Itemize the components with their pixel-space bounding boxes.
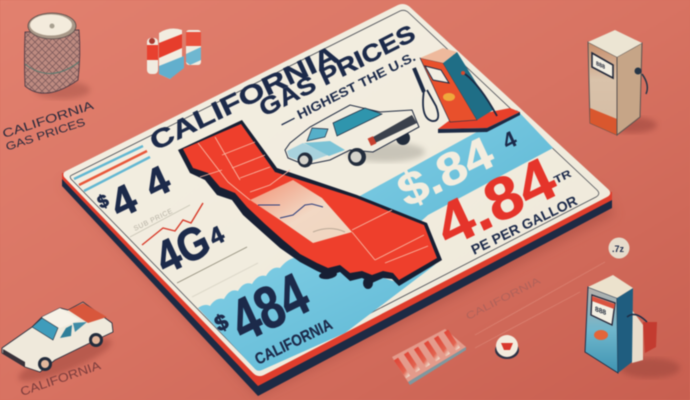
label: California Gas Prices: [0, 98, 99, 154]
title: California Gas Prices: GAS PRICES: [255, 20, 420, 122]
icon: standalone fuel pump top right: [588, 30, 657, 135]
price: $4 4: 4: [138, 158, 177, 207]
island: south: [363, 277, 373, 289]
label: California under truck: CALIFORNIA: [18, 358, 102, 399]
faint caption: SUB PRICE: [133, 208, 174, 233]
price: 4.84 per gallon: 4.84: [425, 144, 566, 260]
inner border: [70, 10, 599, 370]
card face: [63, 4, 610, 376]
icon: fuel pump bottom right: [585, 275, 680, 378]
price: $.84 4: $.84: [389, 126, 502, 217]
title: California Gas Prices: [146, 20, 420, 156]
icon: fuel pump bottom right: 888: [595, 306, 606, 317]
icon: fuel pump on card: [414, 48, 520, 133]
icon: mesh basket: [24, 13, 90, 99]
price: $4 4: 4: [103, 174, 144, 227]
left column prices and trend: [94, 158, 336, 369]
blue panel bottom left: [198, 257, 436, 371]
blue band right: [358, 110, 553, 240]
price: $4 4: $: [94, 190, 112, 213]
price: 4G 4: 4: [205, 221, 229, 251]
price: 4G 4: 4G: [147, 213, 218, 284]
icon: round badge: [495, 335, 519, 359]
panel: tilted information card: [62, 4, 615, 396]
label: California Gas Prices: CALIFORNIA: [1, 98, 95, 141]
label: California Gas Prices: GAS PRICES: [4, 116, 87, 154]
title: California Gas Prices: — HIGHEST THE U.S.: [278, 49, 418, 131]
price: $484 California: CALIFORNIA: [253, 316, 336, 369]
island: north: [319, 270, 337, 280]
price: $484 California: 484: [220, 260, 319, 355]
right price block: [389, 125, 580, 260]
icon: sedan on card: [285, 105, 425, 168]
faint guide lines: [475, 262, 605, 348]
caption: per gallon: PE PER GALLOR: [469, 192, 580, 258]
right price block: TR: [552, 168, 574, 187]
card shadow: [62, 182, 615, 396]
icon: small price chip: .7z: [612, 244, 625, 254]
title: California Gas Prices: CALIFORNIA: [146, 40, 343, 156]
chart line: price trend: [142, 203, 203, 245]
right price block: 4: [498, 125, 521, 155]
icon: red white blue canisters: [147, 29, 201, 79]
icon: pickup truck bottom left: [2, 302, 115, 389]
icon: small price chip: [608, 238, 630, 258]
icon: standalone fuel pump top right: 888: [596, 61, 606, 71]
county lines: [198, 137, 428, 263]
price: $484 California: $: [211, 309, 232, 337]
header stripes: [74, 146, 150, 191]
label: faded California: CALIFORNIA: [464, 275, 543, 323]
inland pale patch: [250, 180, 352, 243]
icon: striped bar swatches: [392, 329, 466, 385]
price: $4 4: [94, 158, 177, 227]
map: California: [178, 120, 442, 289]
card edge: [62, 173, 612, 396]
